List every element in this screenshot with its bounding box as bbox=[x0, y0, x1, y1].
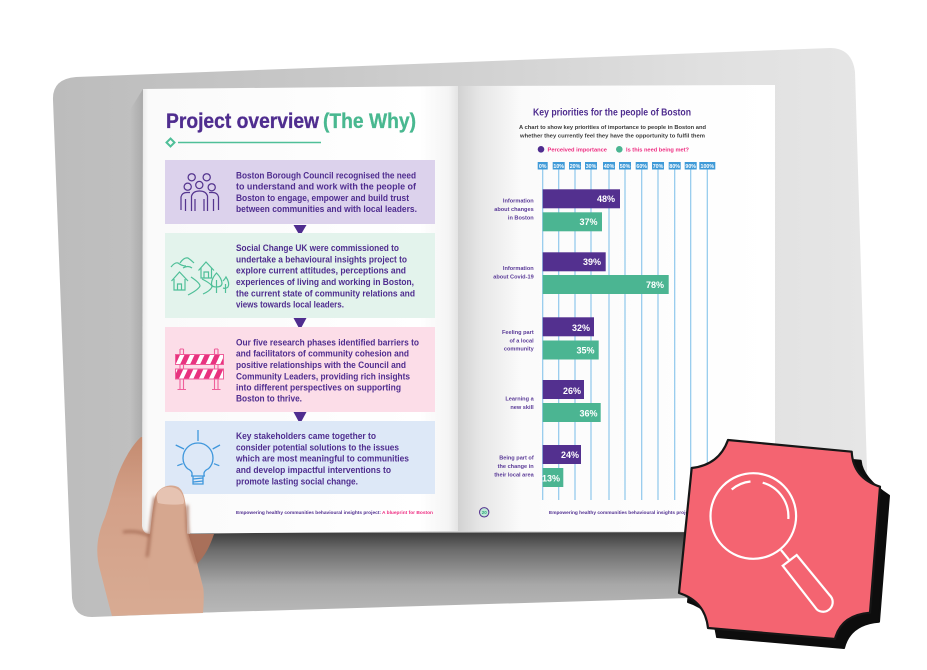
bars: need being met bbox=[543, 212, 669, 487]
panel: research bbox=[165, 327, 435, 412]
icon: magnifier bbox=[710, 473, 833, 612]
grey background panel bbox=[53, 48, 870, 617]
legend: Is this need being met? bbox=[626, 147, 689, 153]
legend: Perceived importance bbox=[548, 147, 608, 153]
chart title: Key priorities for the people of Boston bbox=[533, 107, 691, 118]
icon: light bulb bbox=[176, 430, 220, 484]
row labels: of a local bbox=[509, 338, 534, 344]
bar values: 78% bbox=[646, 280, 664, 290]
text: research: Our five research phases identified barriers to bbox=[236, 337, 420, 347]
text: council: Boston Borough Council recognised the need bbox=[236, 170, 416, 180]
left footer: Empowering healthy communities behavioural insights project: bbox=[236, 510, 381, 515]
thumbnail bbox=[157, 487, 184, 505]
bar values: 48% bbox=[597, 194, 615, 204]
bar values: 32% bbox=[572, 323, 590, 333]
book shadow bbox=[190, 532, 790, 613]
bar chart: 0% bbox=[539, 164, 547, 170]
text: stakeholders: consider potential solutions to the issues bbox=[236, 442, 399, 452]
icon: road barrier bbox=[176, 349, 224, 390]
text: commission: undertake a behavioural insights project to bbox=[236, 254, 408, 264]
panel: commission bbox=[165, 233, 435, 318]
row labels: in Boston bbox=[508, 216, 534, 222]
row labels: the change in bbox=[498, 464, 534, 470]
bar chart: 100% bbox=[701, 164, 714, 170]
text: stakeholders: and develop impactful interventions to bbox=[236, 465, 392, 475]
arrow bbox=[294, 412, 306, 424]
panel: council bbox=[165, 160, 435, 224]
bar values: 24% bbox=[561, 450, 579, 460]
row labels: Information bbox=[503, 199, 534, 205]
bar values: 39% bbox=[583, 257, 601, 267]
thumb shading bbox=[123, 497, 197, 563]
text: research: Boston to thrive. bbox=[236, 394, 302, 404]
text: stakeholders: Key stakeholders came together to bbox=[236, 431, 377, 441]
text: research: into different perspectives on supporting bbox=[236, 382, 401, 392]
bar chart: 20% bbox=[570, 164, 581, 170]
booklet bbox=[142, 85, 775, 534]
title accent: (The Why) bbox=[323, 110, 416, 133]
text: research bbox=[236, 337, 420, 404]
text: commission: Social Change UK were commissioned to bbox=[236, 243, 400, 253]
row labels: Information bbox=[503, 266, 534, 272]
bar chart: 90% bbox=[685, 164, 696, 170]
bar values: 37% bbox=[579, 217, 598, 227]
icon: village bbox=[171, 258, 229, 295]
right page bbox=[458, 85, 775, 532]
text: stakeholders: promote lasting social change. bbox=[236, 476, 358, 486]
text: commission: explore current attitudes, perceptions and bbox=[236, 266, 406, 276]
panel: stakeholders bbox=[165, 421, 435, 494]
badge shadow bbox=[688, 449, 889, 648]
bar chart: 50% bbox=[620, 164, 631, 170]
text: council: to understand and work with the people of bbox=[236, 182, 416, 192]
text: commission bbox=[236, 243, 415, 310]
text: commission: the current state of community relations and bbox=[236, 288, 415, 298]
text: research: Community Leaders, providing rich insights bbox=[236, 371, 410, 381]
bar values: 35% bbox=[576, 346, 594, 356]
text: research: positive relationships with the Council and bbox=[236, 360, 406, 370]
bar values: 36% bbox=[579, 408, 598, 418]
bar values bbox=[542, 194, 664, 484]
bar chart: 10% bbox=[553, 164, 564, 170]
axis labels bbox=[538, 162, 715, 170]
text: council: Boston to engage, empower and build trust bbox=[236, 193, 409, 203]
bar chart bbox=[493, 162, 715, 500]
left page bbox=[142, 86, 458, 534]
page overview title: Project overview bbox=[166, 110, 320, 133]
row labels: new skill bbox=[510, 405, 534, 411]
bar values: 13% bbox=[542, 474, 560, 484]
text: research: and facilitators of community cohesion and bbox=[236, 349, 409, 359]
text: commission: views towards local leaders. bbox=[236, 300, 344, 310]
thumb bbox=[123, 485, 202, 590]
title underline with diamond bbox=[166, 138, 321, 146]
text: commission: experiences of living and working in Boston, bbox=[236, 277, 414, 287]
row labels: their local area bbox=[494, 472, 535, 478]
row labels: Feeling part bbox=[502, 330, 534, 336]
bar values: 26% bbox=[563, 386, 581, 396]
bar chart: 30% bbox=[586, 164, 597, 170]
chart subtitle: whether they currently feel they have the opportunity to fulfil them bbox=[519, 133, 705, 139]
badge: magnifying glass bbox=[679, 440, 889, 648]
text: stakeholders: which are most meaningful to communities bbox=[235, 454, 409, 464]
page number: 20 bbox=[482, 510, 487, 515]
arrow bbox=[294, 318, 306, 330]
bars: perceived importance bbox=[543, 189, 620, 464]
chart subtitle: A chart to show key priorities of importance to people in Boston and bbox=[519, 125, 706, 131]
badge face bbox=[679, 440, 880, 639]
right footer: Empowering healthy communities behavioural insights project: bbox=[549, 510, 694, 515]
row labels: Learning a bbox=[505, 397, 535, 403]
icon: people group bbox=[181, 174, 218, 211]
row labels: community bbox=[504, 347, 535, 353]
legend bbox=[538, 146, 689, 153]
left edge shadow bbox=[130, 89, 143, 500]
text: council: between communities and with local leaders. bbox=[236, 204, 417, 214]
text: council bbox=[236, 170, 417, 214]
bar chart: 70% bbox=[653, 164, 664, 170]
bar chart: 80% bbox=[669, 164, 680, 170]
gridlines bbox=[543, 165, 707, 500]
left footer: A blueprint for Boston bbox=[382, 510, 433, 515]
hand behind the book bbox=[97, 437, 214, 616]
text: stakeholders bbox=[235, 431, 409, 486]
row labels: about Covid-19 bbox=[493, 275, 534, 281]
row labels: about changes bbox=[494, 207, 534, 213]
row labels: Being part of bbox=[499, 455, 534, 461]
arrow bbox=[294, 225, 306, 236]
chart subtitle bbox=[519, 125, 706, 139]
bar chart: 40% bbox=[604, 164, 615, 170]
row labels bbox=[493, 199, 535, 478]
page number bbox=[480, 508, 489, 517]
bar chart: 60% bbox=[636, 164, 647, 170]
